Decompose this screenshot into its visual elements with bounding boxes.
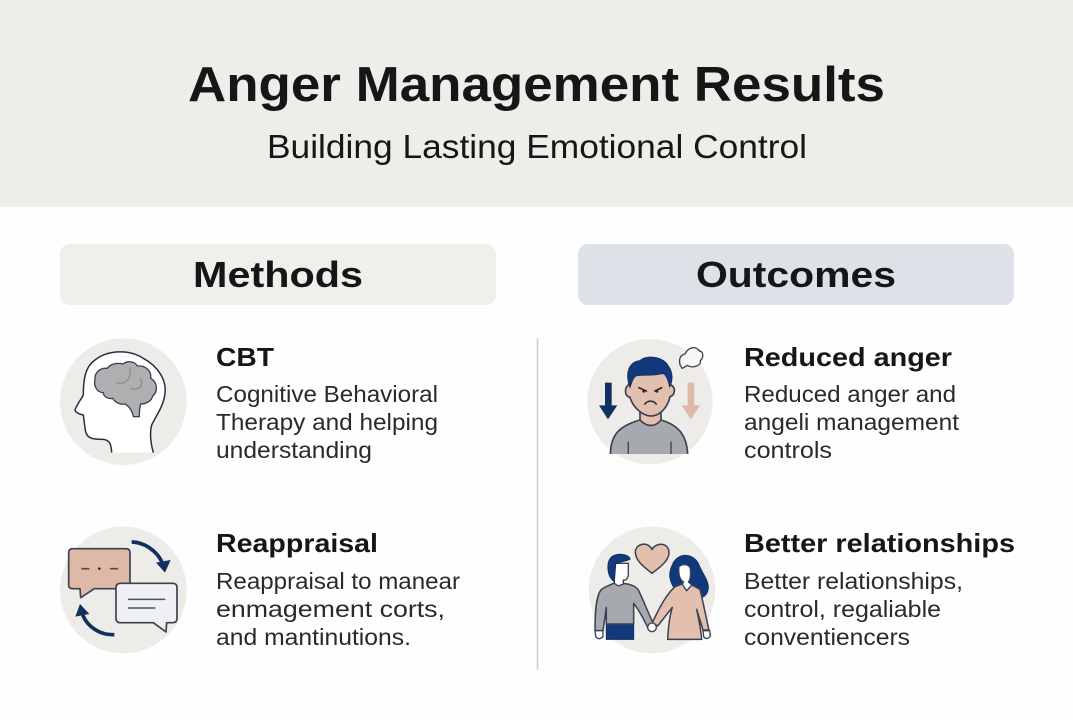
text block: CBT: Therapy and helping — [216, 409, 438, 435]
text block: Reappraisal: Reappraisal — [216, 528, 378, 558]
text block: CBT — [216, 342, 438, 463]
text block: Better relationships — [744, 528, 1015, 650]
header band — [0, 0, 1073, 207]
subtitle: Building Lasting Emotional Control — [267, 128, 807, 165]
panel heading: Outcomes: Outcomes — [696, 254, 896, 295]
icon: couple holding hands with heart — [589, 527, 715, 653]
text block: CBT: Cognitive Behavioral — [216, 381, 438, 407]
panel heading: Methods: Methods — [193, 254, 363, 295]
icon: angry person with down arrows — [587, 339, 713, 464]
icon: head with brain — [60, 338, 187, 465]
text block: CBT: understanding — [216, 437, 372, 463]
title: Anger Management Results — [188, 58, 885, 112]
text block: Reduced anger: Reduced anger and — [744, 381, 956, 407]
text block: Better relationships: Better relationships — [744, 528, 1015, 558]
text block: Reappraisal: enmagement corts, — [216, 596, 445, 622]
text block: Reappraisal — [216, 528, 460, 650]
text block: Better relationships: Better relationships, — [744, 568, 963, 594]
icon: speech bubbles with cycle arrows — [60, 527, 187, 653]
text block: CBT: CBT — [216, 342, 274, 372]
panel heading: Outcomes — [578, 244, 1014, 305]
text block: Reduced anger: angeli management — [744, 409, 960, 435]
text block: Reduced anger: Reduced anger — [744, 342, 952, 372]
text block: Better relationships: control, regaliable — [744, 596, 941, 622]
text block: Reappraisal: Reappraisal to manear — [216, 568, 460, 594]
text block: Reduced anger: controls — [744, 437, 832, 463]
text block: Better relationships: conventiencers — [744, 624, 910, 650]
text block: Reduced anger — [744, 342, 960, 463]
text block: Reappraisal: and mantinutions. — [216, 624, 411, 650]
panel heading: Methods — [60, 244, 496, 305]
